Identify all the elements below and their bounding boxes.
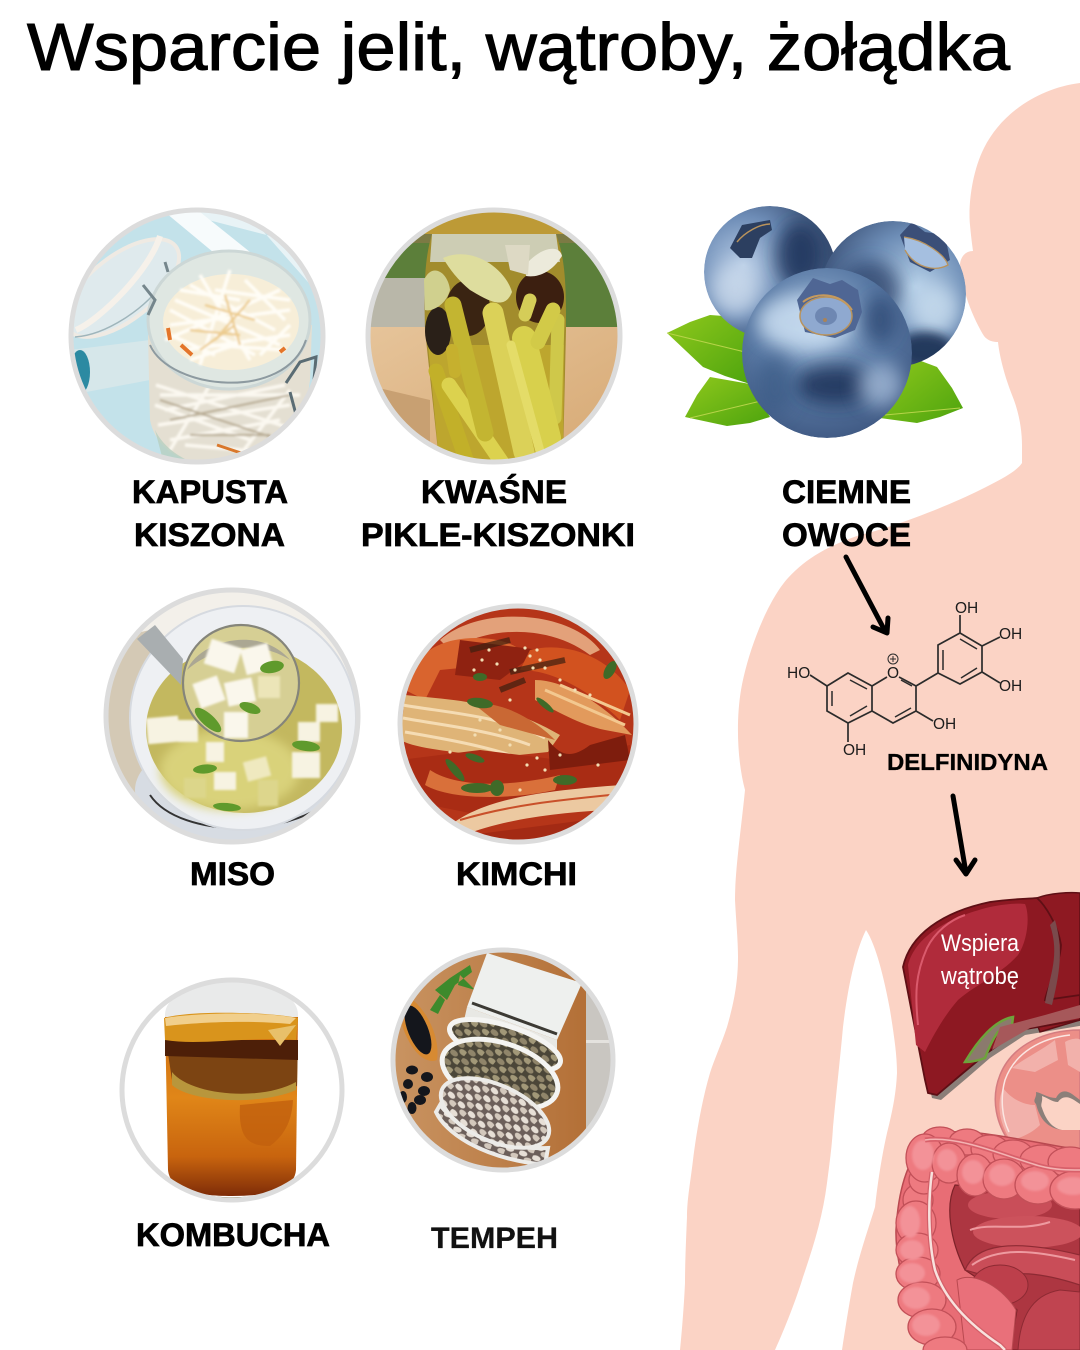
small intestine xyxy=(950,1185,1080,1350)
colon lobes xyxy=(896,1127,1080,1350)
scallion and sesame xyxy=(443,659,619,796)
photo ring xyxy=(393,950,613,1170)
label: kwaśne pikle-kiszonki: KWAŚNE xyxy=(421,474,567,510)
chemical structure: delphinidin: O xyxy=(887,665,899,682)
label: ciemne owoce xyxy=(782,474,911,553)
photo: pickles jar xyxy=(370,212,618,460)
photo: miso soup xyxy=(105,589,361,850)
jar mouth xyxy=(148,251,310,389)
label: delfinidyna: DELFINIDYNA xyxy=(887,749,1048,775)
photo ring xyxy=(106,590,358,842)
label: kombucha: KOMBUCHA xyxy=(136,1217,330,1253)
label: tempeh: TEMPEH xyxy=(431,1222,558,1255)
slices xyxy=(447,1017,563,1071)
lower pink loop xyxy=(957,1277,1016,1350)
arrow: delfinidyna to liver xyxy=(953,796,975,874)
chemical structure: delphinidin: OH xyxy=(843,742,866,759)
chemical structure: delphinidin: OH xyxy=(999,626,1022,643)
photo ring xyxy=(71,210,323,462)
front berry xyxy=(742,268,912,438)
leaves xyxy=(667,315,963,426)
photo ring xyxy=(400,606,636,842)
scallions xyxy=(191,659,321,812)
photo: sauerkraut jar xyxy=(74,212,320,460)
illustration: liver xyxy=(903,893,1080,1100)
label: kimchi: KIMCHI xyxy=(456,856,577,892)
title: Wsparcie jelit, wątroby, żołądka xyxy=(27,10,1011,85)
ladle xyxy=(137,625,299,741)
photo: kimchi xyxy=(398,604,638,850)
chemical structure: delphinidin: OH xyxy=(999,678,1022,695)
label: kapusta kiszona: KISZONA xyxy=(134,517,285,553)
chemical structure: delphinidin xyxy=(787,600,1022,759)
label: kapusta kiszona xyxy=(132,474,288,553)
label: miso: MISO xyxy=(190,856,275,892)
left berry xyxy=(704,206,836,338)
chemical structure: delphinidin: OH xyxy=(933,716,956,733)
photo: kombucha jar xyxy=(164,982,298,1198)
illustration: stomach xyxy=(995,1030,1080,1160)
label: kwaśne pikle-kiszonki xyxy=(361,474,635,553)
arrow: owoce to delfinidyna xyxy=(846,557,888,633)
label: ciemne owoce: OWOCE xyxy=(782,517,911,553)
photo ring xyxy=(122,980,342,1200)
herbs xyxy=(430,965,475,1014)
tempeh slab xyxy=(467,953,582,1040)
right berry xyxy=(820,221,966,368)
label: ciemne owoce: CIEMNE xyxy=(782,474,911,510)
illustration: intestines xyxy=(896,1127,1080,1350)
text: wspiera wątrobę: Wspiera xyxy=(941,930,1020,957)
tofu in soup xyxy=(146,704,338,806)
colon highlights xyxy=(899,1140,1080,1336)
label: kapusta kiszona: KAPUSTA xyxy=(132,474,288,510)
chemical structure: delphinidin: OH xyxy=(955,600,978,617)
text: wspiera wątrobę: wątrobę xyxy=(940,963,1019,990)
photo: tempeh xyxy=(391,948,616,1173)
blueberries xyxy=(667,206,966,438)
jar body xyxy=(148,325,312,465)
chemical structure: delphinidin: HO xyxy=(787,665,810,682)
photo ring xyxy=(368,210,620,462)
label: kwaśne pikle-kiszonki: PIKLE-KISZONKI xyxy=(361,517,635,553)
text: wspiera wątrobę xyxy=(940,930,1020,990)
scoop of black beans xyxy=(402,1000,438,1061)
body silhouette xyxy=(680,83,1080,1350)
